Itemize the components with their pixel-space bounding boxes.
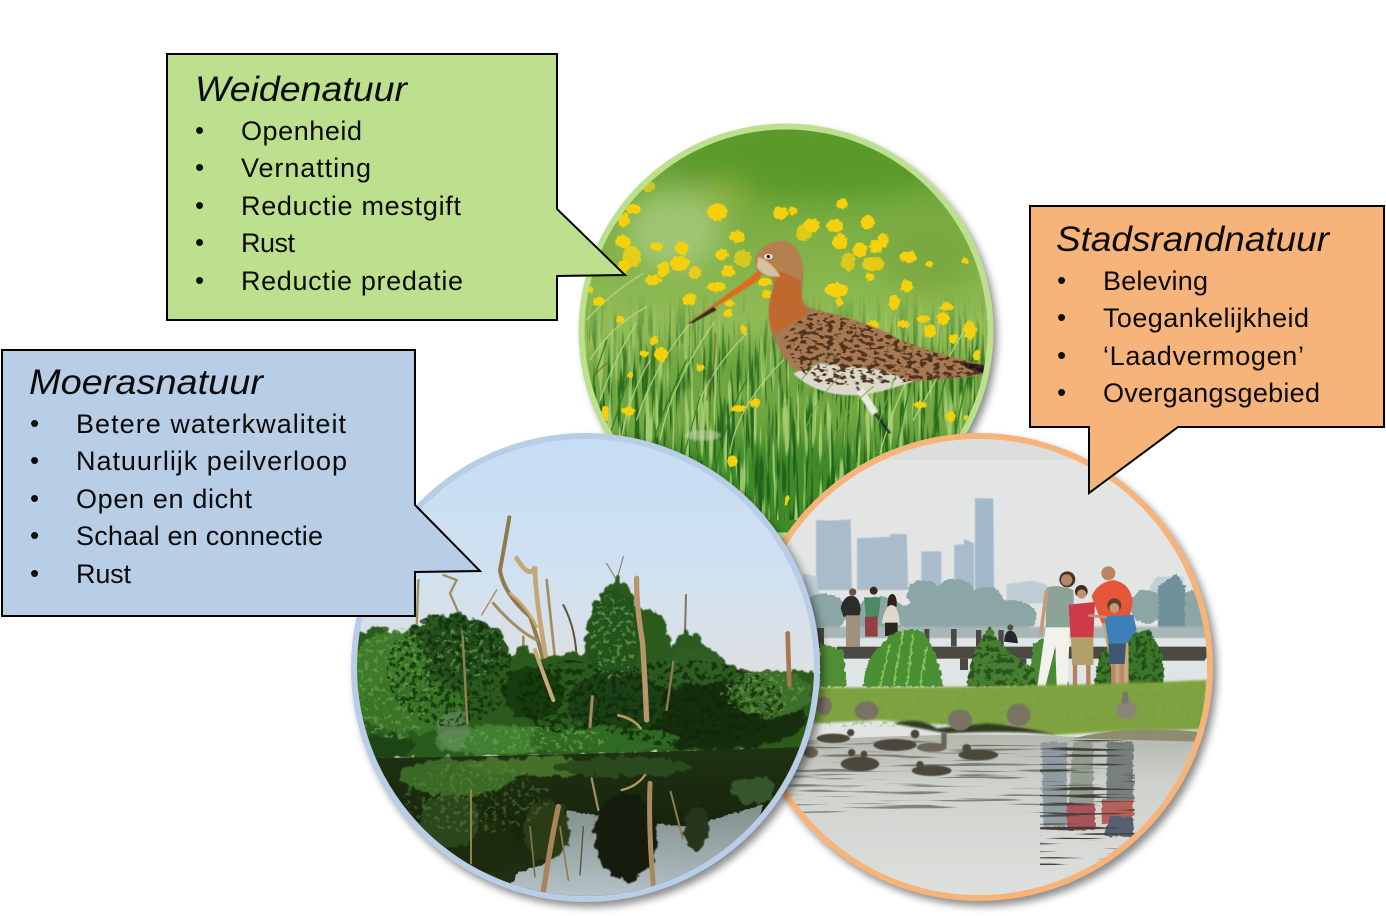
list: Weidenatuur criteria: • xyxy=(195,152,204,182)
lawn xyxy=(813,680,1207,735)
list: Moerasnatuur criteria: Open en dicht xyxy=(76,484,252,514)
list: Weidenatuur criteria xyxy=(195,115,463,296)
dead tree trunks in front xyxy=(463,578,789,728)
water xyxy=(780,735,1207,903)
reflected trees xyxy=(400,757,777,880)
list: Stadsrandnatuur criteria: Toegankelijkheid xyxy=(1103,303,1309,333)
list: Stadsrandnatuur criteria: ‘Laadvermogen’ xyxy=(1103,341,1304,371)
photo circle: marsh with dead trees and reflection xyxy=(350,430,830,910)
list: Stadsrandnatuur criteria xyxy=(1057,265,1320,408)
reflections xyxy=(1040,740,1135,865)
callout: Weidenatuur xyxy=(167,54,625,320)
family xyxy=(1037,566,1137,687)
list: Stadsrandnatuur criteria: Overgangsgebied xyxy=(1103,378,1320,408)
list: Stadsrandnatuur criteria: • xyxy=(1057,302,1066,332)
stone ledge xyxy=(1073,729,1198,742)
pier xyxy=(817,628,1207,670)
list: Weidenatuur criteria: Openheid xyxy=(241,116,362,146)
list: Weidenatuur criteria: • xyxy=(195,265,204,295)
list: Moerasnatuur criteria: Rust xyxy=(76,559,131,589)
list: Weidenatuur criteria: • xyxy=(195,190,204,220)
photo circle: city edge with family and geese xyxy=(740,430,1220,913)
left group of people xyxy=(841,587,900,647)
list: Stadsrandnatuur criteria: Beleving xyxy=(1103,266,1208,296)
callout: Stadsrandnatuur xyxy=(1030,206,1384,493)
dead tree trunks behind xyxy=(416,515,687,660)
list: Weidenatuur criteria: • xyxy=(195,227,204,257)
heading: Moerasnatuur: Moerasnatuur xyxy=(29,363,264,402)
list: Moerasnatuur criteria: Betere waterkwaliteit xyxy=(76,409,346,439)
list: Moerasnatuur criteria: • xyxy=(30,408,39,438)
grass streak texture xyxy=(580,293,1000,520)
foreground grass over bird xyxy=(780,353,897,440)
geese xyxy=(803,692,1137,776)
list: Moerasnatuur criteria xyxy=(30,408,347,589)
list: Moerasnatuur criteria: • xyxy=(30,445,39,475)
list: Moerasnatuur criteria: • xyxy=(30,483,39,513)
flowers xyxy=(587,181,980,505)
reflected sky xyxy=(507,805,763,897)
seated person xyxy=(1004,624,1018,643)
distant trees xyxy=(800,573,1208,637)
tree masses xyxy=(350,577,817,760)
heading: Stadsrandnatuur: Stadsrandnatuur xyxy=(1056,220,1330,259)
grass blades xyxy=(587,273,977,480)
callout: Moerasnatuur xyxy=(2,350,480,616)
godwit xyxy=(687,241,984,433)
list: Weidenatuur criteria: • xyxy=(195,115,204,145)
list: Moerasnatuur criteria: Natuurlijk peilverloop xyxy=(76,446,347,476)
list: Stadsrandnatuur criteria: • xyxy=(1057,265,1066,295)
photo circle: godwit in meadow xyxy=(578,124,1002,540)
skyline xyxy=(803,498,1183,603)
reflected trunks xyxy=(471,775,683,892)
list: Moerasnatuur criteria: Schaal en connectie xyxy=(76,521,323,551)
shrubs xyxy=(820,627,1163,687)
list: Stadsrandnatuur criteria: • xyxy=(1057,340,1066,370)
list: Stadsrandnatuur criteria: • xyxy=(1057,377,1066,407)
heading: Weidenatuur: Weidenatuur xyxy=(195,70,408,109)
water xyxy=(376,747,800,896)
list: Moerasnatuur criteria: • xyxy=(30,520,39,550)
list: Weidenatuur criteria: Vernatting xyxy=(241,153,371,183)
list: Weidenatuur criteria: Reductie predatie xyxy=(241,266,463,296)
list: Weidenatuur criteria: Reductie mestgift xyxy=(241,191,461,221)
list: Moerasnatuur criteria: • xyxy=(30,558,39,588)
list: Weidenatuur criteria: Rust xyxy=(241,228,295,258)
